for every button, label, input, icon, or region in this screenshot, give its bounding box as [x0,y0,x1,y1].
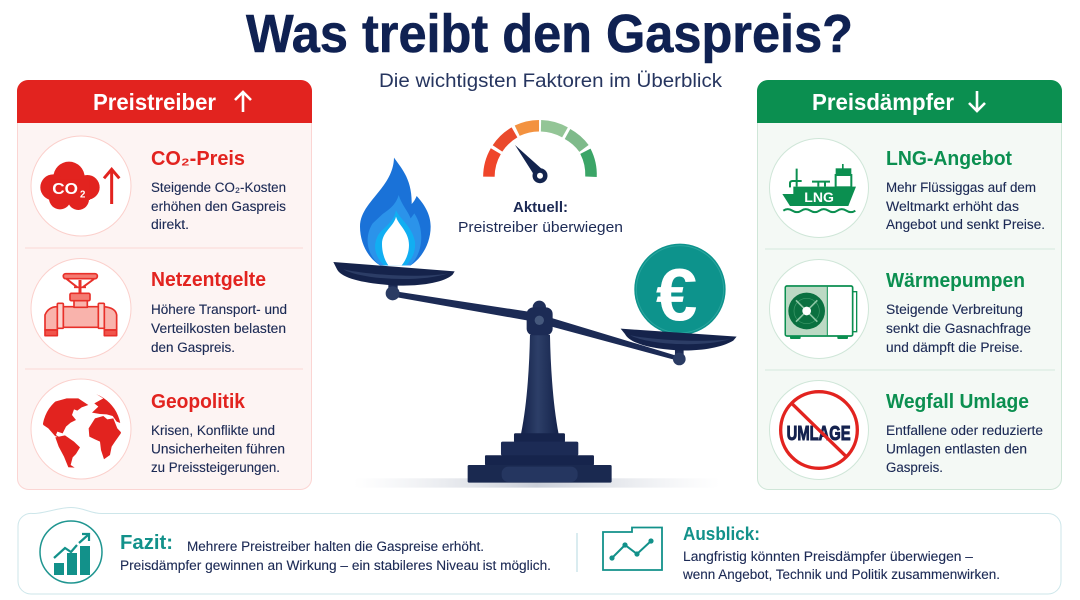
gauge needle [515,145,548,183]
text: Geopolitik: Krisen, Konflikte und [151,423,275,438]
text: Ausblick: wenn Angebot, Technik und Politik zusammenwirken. [682,567,1000,582]
text: Wegfall Umlage: Gaspreis. [886,460,943,475]
text: Wärmepumpen: Steigende Verbreitung [886,302,1023,317]
text: LNG-Angebot: Mehr Flüssiggas auf dem [886,180,1036,195]
text: Netzentgelte [151,302,287,355]
text: Netzentgelte: Höhere Transport- und [151,302,287,317]
icon: rising bar chart [40,521,102,583]
icon: CO2 cloud with arrow: CO [52,181,78,198]
subtitle: Die wichtigsten Faktoren im Überblick [379,71,723,92]
text: Geopolitik: Unsicherheiten führen [151,442,285,456]
scale beam [386,282,686,365]
item: Wegfall Umlage [770,380,1043,480]
heading: Wegfall Umlage: Wegfall Umlage [886,391,1029,413]
text: Fazit [120,532,551,573]
text: CO2-Preis: erhöhen den Gaspreis [151,199,286,214]
heading: Wärmepumpen: Wärmepumpen [886,270,1025,292]
text: Fazit: Mehrere Preistreiber halten die Gaspreise erhöht. [187,539,484,554]
text: Netzentgelte: Verteilkosten belasten [151,321,286,336]
heading: Geopolitik: Geopolitik [151,391,246,413]
text: Fazit: Fazit: [120,532,173,554]
text: Fazit: Preisdämpfer gewinnen an Wirkung – ein stabileres Niveau ist möglich. [120,558,551,573]
text: Netzentgelte: den Gaspreis. [151,340,235,355]
gauge label: Aktuell: [513,199,568,216]
text: Ausblick: Langfristig könnten Preisdämpfer überwiegen – [683,549,974,564]
icon: euro coin [634,244,726,337]
icon: pipe valve [31,258,131,358]
right scale pan [621,329,737,351]
icon: heat pump [770,260,868,358]
text: Wärmepumpen: senkt die Gasnachfrage [886,321,1031,336]
panel: Preisdämpfer [757,80,1062,490]
text: Ausblick: Ausblick: [683,524,760,544]
text: LNG-Angebot: Weltmarkt erhöht das [886,199,1019,214]
text: Wegfall Umlage: Umlagen entlasten den [886,442,1027,456]
item: LNG-Angebot [770,138,1045,238]
icon: CO2 cloud with arrow [31,136,131,236]
text: Wegfall Umlage: Entfallene oder reduzierte [886,423,1043,438]
text: Ausblick [682,524,1000,582]
title: Was treibt den Gaspreis? [246,4,853,64]
text: LNG-Angebot [886,180,1045,232]
text: LNG-Angebot: Angebot und senkt Preise. [886,217,1045,232]
item: Geopolitik [31,379,285,479]
panel header: Preisdämpfer: Preisdämpfer [812,89,954,115]
icon: crossed-out Umlage: UMLAGE [787,422,851,445]
scale illustration [333,158,737,488]
icon: CO2 cloud with arrow: 2 [80,190,85,201]
gauge [489,126,591,177]
text: Wärmepumpen [886,302,1031,355]
panel header: Preisdämpfer [757,80,1062,123]
icon: blue flame [360,158,431,265]
text: CO2-Preis [151,180,286,232]
icon: crossed-out Umlage [770,380,868,480]
icon: outlook chart [603,528,662,570]
heading: CO2-Preis: CO₂-Preis [151,148,245,170]
scale shadow [353,478,720,488]
text: Geopolitik [151,423,285,475]
left scale pan [333,262,455,286]
panel: Preistreiber [17,80,312,490]
text: Wärmepumpen: und dämpft die Preise. [886,340,1023,355]
scale stand [468,335,612,483]
footer panel [18,508,1061,594]
text: CO2-Preis: Steigende CO₂-Kosten [151,180,286,195]
item: CO2-Preis [31,136,286,236]
gauge label: Preistreiber überwiegen [458,219,623,236]
item: Wärmepumpen [770,260,1031,358]
text: CO2-Preis: direkt. [151,217,189,232]
text: Geopolitik: zu Preissteigerungen. [151,460,280,475]
icon: globe [31,379,131,479]
heading: LNG-Angebot: LNG-Angebot [886,148,1012,170]
text: Wegfall Umlage [886,423,1043,475]
panel header: Preistreiber [17,80,312,123]
gauge label [458,199,623,236]
icon: LNG ship: LNG [804,189,834,205]
icon: euro coin: € [656,253,697,337]
item: Netzentgelte [31,258,287,358]
panel header: Preistreiber: Preistreiber [93,89,216,115]
heading: Netzentgelte: Netzentgelte [151,269,266,291]
icon: LNG ship [770,138,868,238]
